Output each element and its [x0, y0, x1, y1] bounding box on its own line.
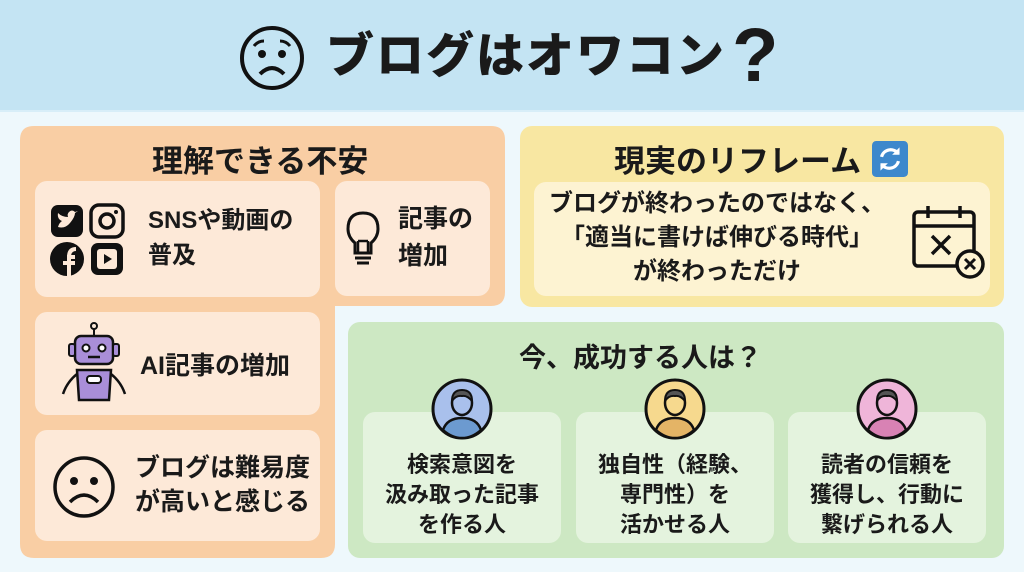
card: originality: 専門性）を	[620, 482, 730, 507]
icon: avatar pink	[856, 378, 918, 440]
panel: successful people	[348, 322, 1004, 558]
icon: question mark: ?	[732, 13, 778, 98]
heading: anxieties: 理解できる不安	[152, 144, 368, 179]
heading: successful: 今、成功する人は？	[519, 343, 762, 373]
card: originality	[576, 378, 774, 543]
item: article increase	[335, 181, 490, 296]
item: AI articles: AI記事の増加	[140, 352, 290, 380]
card: search intent: 検索意図を	[407, 452, 517, 477]
item: SNS	[35, 181, 320, 297]
callout: reframe text: ブログが終わったのではなく、	[549, 190, 885, 217]
icon: avatar yellow	[644, 378, 706, 440]
card: trust: 読者の信頼を	[821, 452, 953, 477]
item: AI articles	[35, 312, 320, 415]
card: trust: 獲得し、行動に	[810, 482, 964, 507]
item: hard blog: が高いと感じる	[135, 488, 310, 516]
icon: bulb	[346, 212, 380, 264]
card: search intent: を作る人	[418, 512, 506, 537]
callout: reframe text	[534, 182, 990, 296]
item: SNS: 普及	[148, 242, 196, 269]
card: trust: 繋げられる人	[821, 512, 953, 537]
icon: calendar x	[912, 206, 985, 279]
panel: reframe	[520, 126, 1004, 307]
callout: reframe text: が終わっただけ	[633, 258, 801, 285]
card: trust	[788, 378, 986, 543]
icon: sad face	[53, 456, 115, 518]
card: search intent: 汲み取った記事	[385, 482, 539, 507]
item: article increase: 増加	[398, 242, 448, 270]
icon: robot	[62, 322, 126, 402]
icon: social icons	[50, 203, 125, 276]
icon: worried face	[240, 26, 304, 90]
heading: reframe: 現実のリフレーム	[614, 144, 861, 179]
icon: avatar blue	[432, 378, 492, 440]
item: hard blog: ブログは難易度	[135, 454, 310, 482]
item: hard blog	[35, 430, 320, 541]
card: originality: 活かせる人	[620, 512, 730, 537]
panel: anxieties	[20, 126, 505, 558]
title: ブログはオワコン	[326, 30, 726, 83]
item: SNS: SNSや動画の	[148, 207, 293, 234]
callout: reframe text: 「適当に書けば伸びる時代」	[561, 224, 873, 251]
item: article increase: 記事の	[398, 205, 473, 233]
header band	[0, 0, 1024, 112]
card: search intent	[363, 378, 561, 543]
card: originality: 独自性（経験、	[598, 452, 752, 477]
icon: refresh	[872, 141, 908, 177]
